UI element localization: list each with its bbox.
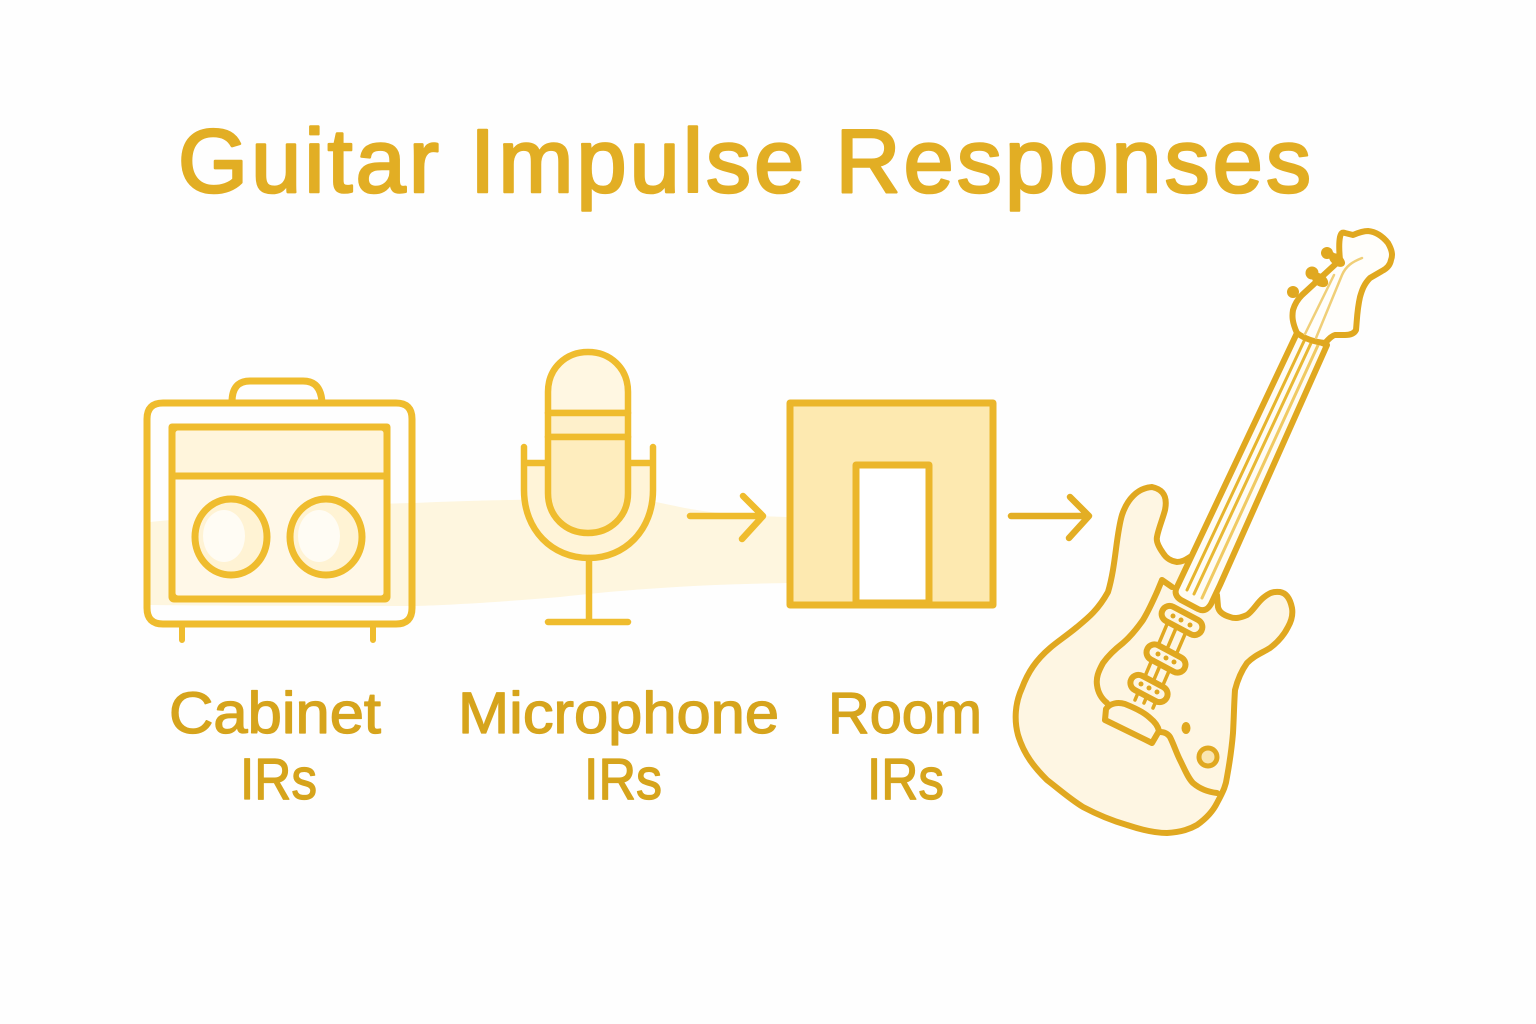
room doorway	[856, 465, 929, 603]
cabinet outer body	[147, 403, 412, 624]
microphone stand	[548, 558, 628, 622]
label line: IRs: IRs	[867, 747, 944, 812]
cabinet speaker panel	[172, 476, 387, 599]
arrow: room to guitar	[1011, 497, 1089, 538]
left speaker	[195, 499, 267, 575]
icon: room	[790, 403, 993, 605]
microphone cradle fill	[525, 465, 652, 558]
right speaker	[290, 499, 362, 575]
tuning pegs	[1287, 247, 1348, 298]
body strings	[1135, 610, 1192, 708]
label line: Microphone: Microphone	[458, 681, 779, 746]
tone knob	[1199, 748, 1217, 766]
headstock strings	[1305, 258, 1362, 338]
middle pickup	[1144, 642, 1188, 675]
left speaker highlight	[203, 510, 245, 562]
room walls	[790, 403, 993, 605]
neck pickup	[1159, 603, 1205, 638]
cabinet inner frame	[172, 427, 387, 599]
microphone capsule top	[548, 352, 628, 413]
microphone capsule bottom	[548, 437, 628, 533]
label: Room IRs	[828, 681, 982, 812]
label line: IRs: IRs	[240, 747, 317, 812]
pickup pole dots	[1138, 614, 1192, 694]
cabinet control panel	[172, 427, 387, 476]
volume knob	[1182, 722, 1190, 734]
icon: guitar cabinet	[147, 381, 412, 640]
microphone capsule band	[548, 413, 628, 437]
pickguard	[1097, 580, 1217, 793]
signal band connecting the cabinet, microphone and room	[150, 500, 790, 606]
label line: IRs: IRs	[584, 747, 662, 812]
illustration: electric guitar	[1016, 231, 1392, 833]
icon: microphone	[524, 352, 653, 622]
bridge pickup	[1128, 672, 1170, 705]
label line: Room: Room	[828, 681, 982, 746]
label: Cabinet IRs	[169, 681, 381, 812]
cabinet handle	[232, 381, 322, 402]
cabinet feet	[182, 626, 373, 640]
label: Microphone IRs	[458, 681, 779, 812]
title: Guitar Impulse Responses	[178, 112, 1311, 212]
neck strings	[1187, 339, 1319, 598]
guitar body	[1016, 487, 1292, 833]
arrow: microphone to room	[690, 496, 763, 539]
microphone cradle	[524, 447, 653, 558]
label line: Cabinet: Cabinet	[169, 681, 381, 746]
guitar headstock	[1292, 231, 1392, 343]
bridge	[1105, 703, 1159, 743]
right speaker highlight	[298, 510, 340, 562]
guitar neck	[1176, 333, 1327, 610]
